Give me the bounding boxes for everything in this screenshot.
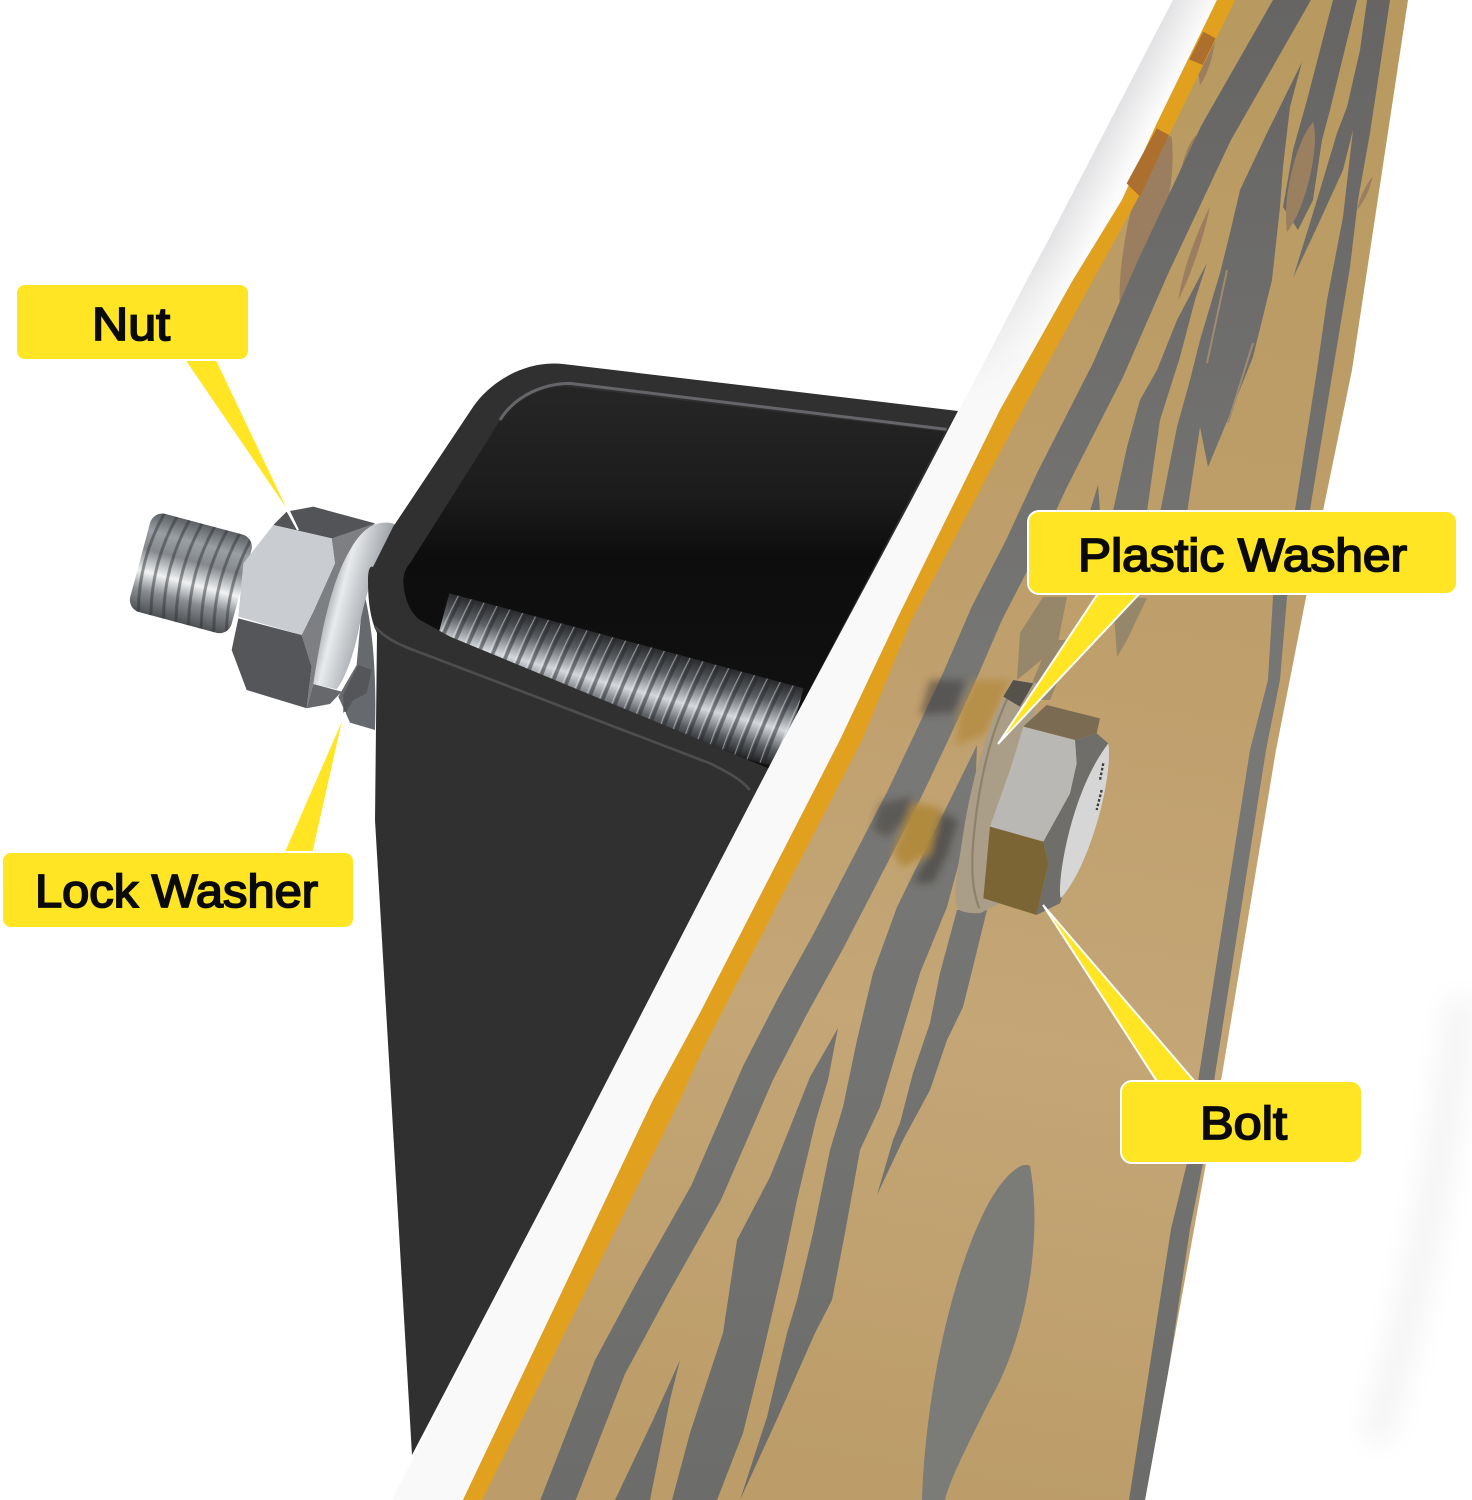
label: Bolt: [1043, 905, 1362, 1163]
label box: [2, 852, 354, 928]
lower washer and shank: [338, 590, 375, 730]
bottom spike: [615, 1360, 680, 1500]
bracket inner channel: [403, 387, 945, 768]
label text: Lock Washer: [35, 865, 318, 917]
label box: [16, 284, 249, 360]
bolt lower facet: [983, 827, 1048, 915]
bolt top facet: [1023, 705, 1100, 740]
oval scuff on the band: [1286, 122, 1315, 232]
nut dark facet: [232, 618, 312, 708]
plastic washer: [955, 680, 1040, 913]
bolt side facets: [1037, 733, 1108, 915]
label box: [1028, 511, 1457, 594]
plate graphic stripes: [530, 0, 1390, 1500]
label box: [1121, 1081, 1362, 1163]
plate surface: [463, 0, 1408, 1500]
bolt shadow on plate: [873, 680, 1010, 883]
pointer: [183, 358, 298, 530]
bolt head face: [1060, 743, 1109, 898]
pale streaks on bands: [1207, 270, 1253, 423]
label text: Plastic Washer: [1078, 529, 1407, 581]
streaks above the bolt: [1017, 597, 1147, 700]
edge fade blending into the white strip: [958, 237, 1105, 413]
washer top notch: [1003, 680, 1033, 707]
bracket lower rim highlight: [375, 627, 750, 790]
orange plate edge: [463, 0, 1235, 1500]
background soft reflection: [1375, 1000, 1462, 1440]
washer inner ring: [972, 693, 1010, 908]
lock washer split: [343, 665, 372, 717]
third band under the washer: [877, 910, 987, 1195]
small spike above label: [1090, 485, 1100, 511]
head stamp marks: [1097, 763, 1103, 810]
label text: Bolt: [1200, 1097, 1287, 1149]
upper edge fade: [958, 0, 1217, 413]
bolt lit facet: [990, 727, 1077, 842]
nut top facet: [273, 507, 375, 538]
upper central spike: [1160, 62, 1302, 513]
right edge band with spike: [1129, 0, 1390, 1500]
lower spike: [672, 1028, 838, 1500]
nut shoulder below washer: [307, 684, 342, 708]
bolt assembly on the plate: [955, 680, 1109, 915]
nut bevel facet: [302, 523, 375, 708]
upper right band: [1283, 0, 1357, 230]
label: Plastic Washer: [998, 511, 1457, 744]
white plate edge: [392, 0, 1217, 1500]
nut, lock washer and threaded end: [127, 507, 397, 730]
lock washer ring: [313, 522, 397, 689]
second long band: [740, 745, 977, 1500]
edge scuffs: [1127, 32, 1216, 197]
upper left spike: [1113, 263, 1207, 511]
label text: Nut: [92, 298, 170, 350]
brown scuffs: [1119, 40, 1373, 313]
threaded rod inside the bracket: [428, 593, 803, 769]
pointer: [283, 712, 345, 854]
bracket: [368, 364, 958, 1455]
large oval stripe: [922, 1165, 1034, 1500]
bracket outer body: [368, 364, 958, 1455]
bracket top highlight: [500, 383, 947, 429]
threaded bolt end: [127, 511, 255, 636]
pointer: [1043, 905, 1196, 1083]
pointer: [998, 592, 1141, 744]
label: Nut: [16, 284, 298, 530]
plate: [463, 0, 1408, 1500]
label: Lock Washer: [2, 712, 354, 928]
nut lit facet: [238, 525, 335, 635]
long stripe parallel to the edge: [530, 0, 1320, 1500]
